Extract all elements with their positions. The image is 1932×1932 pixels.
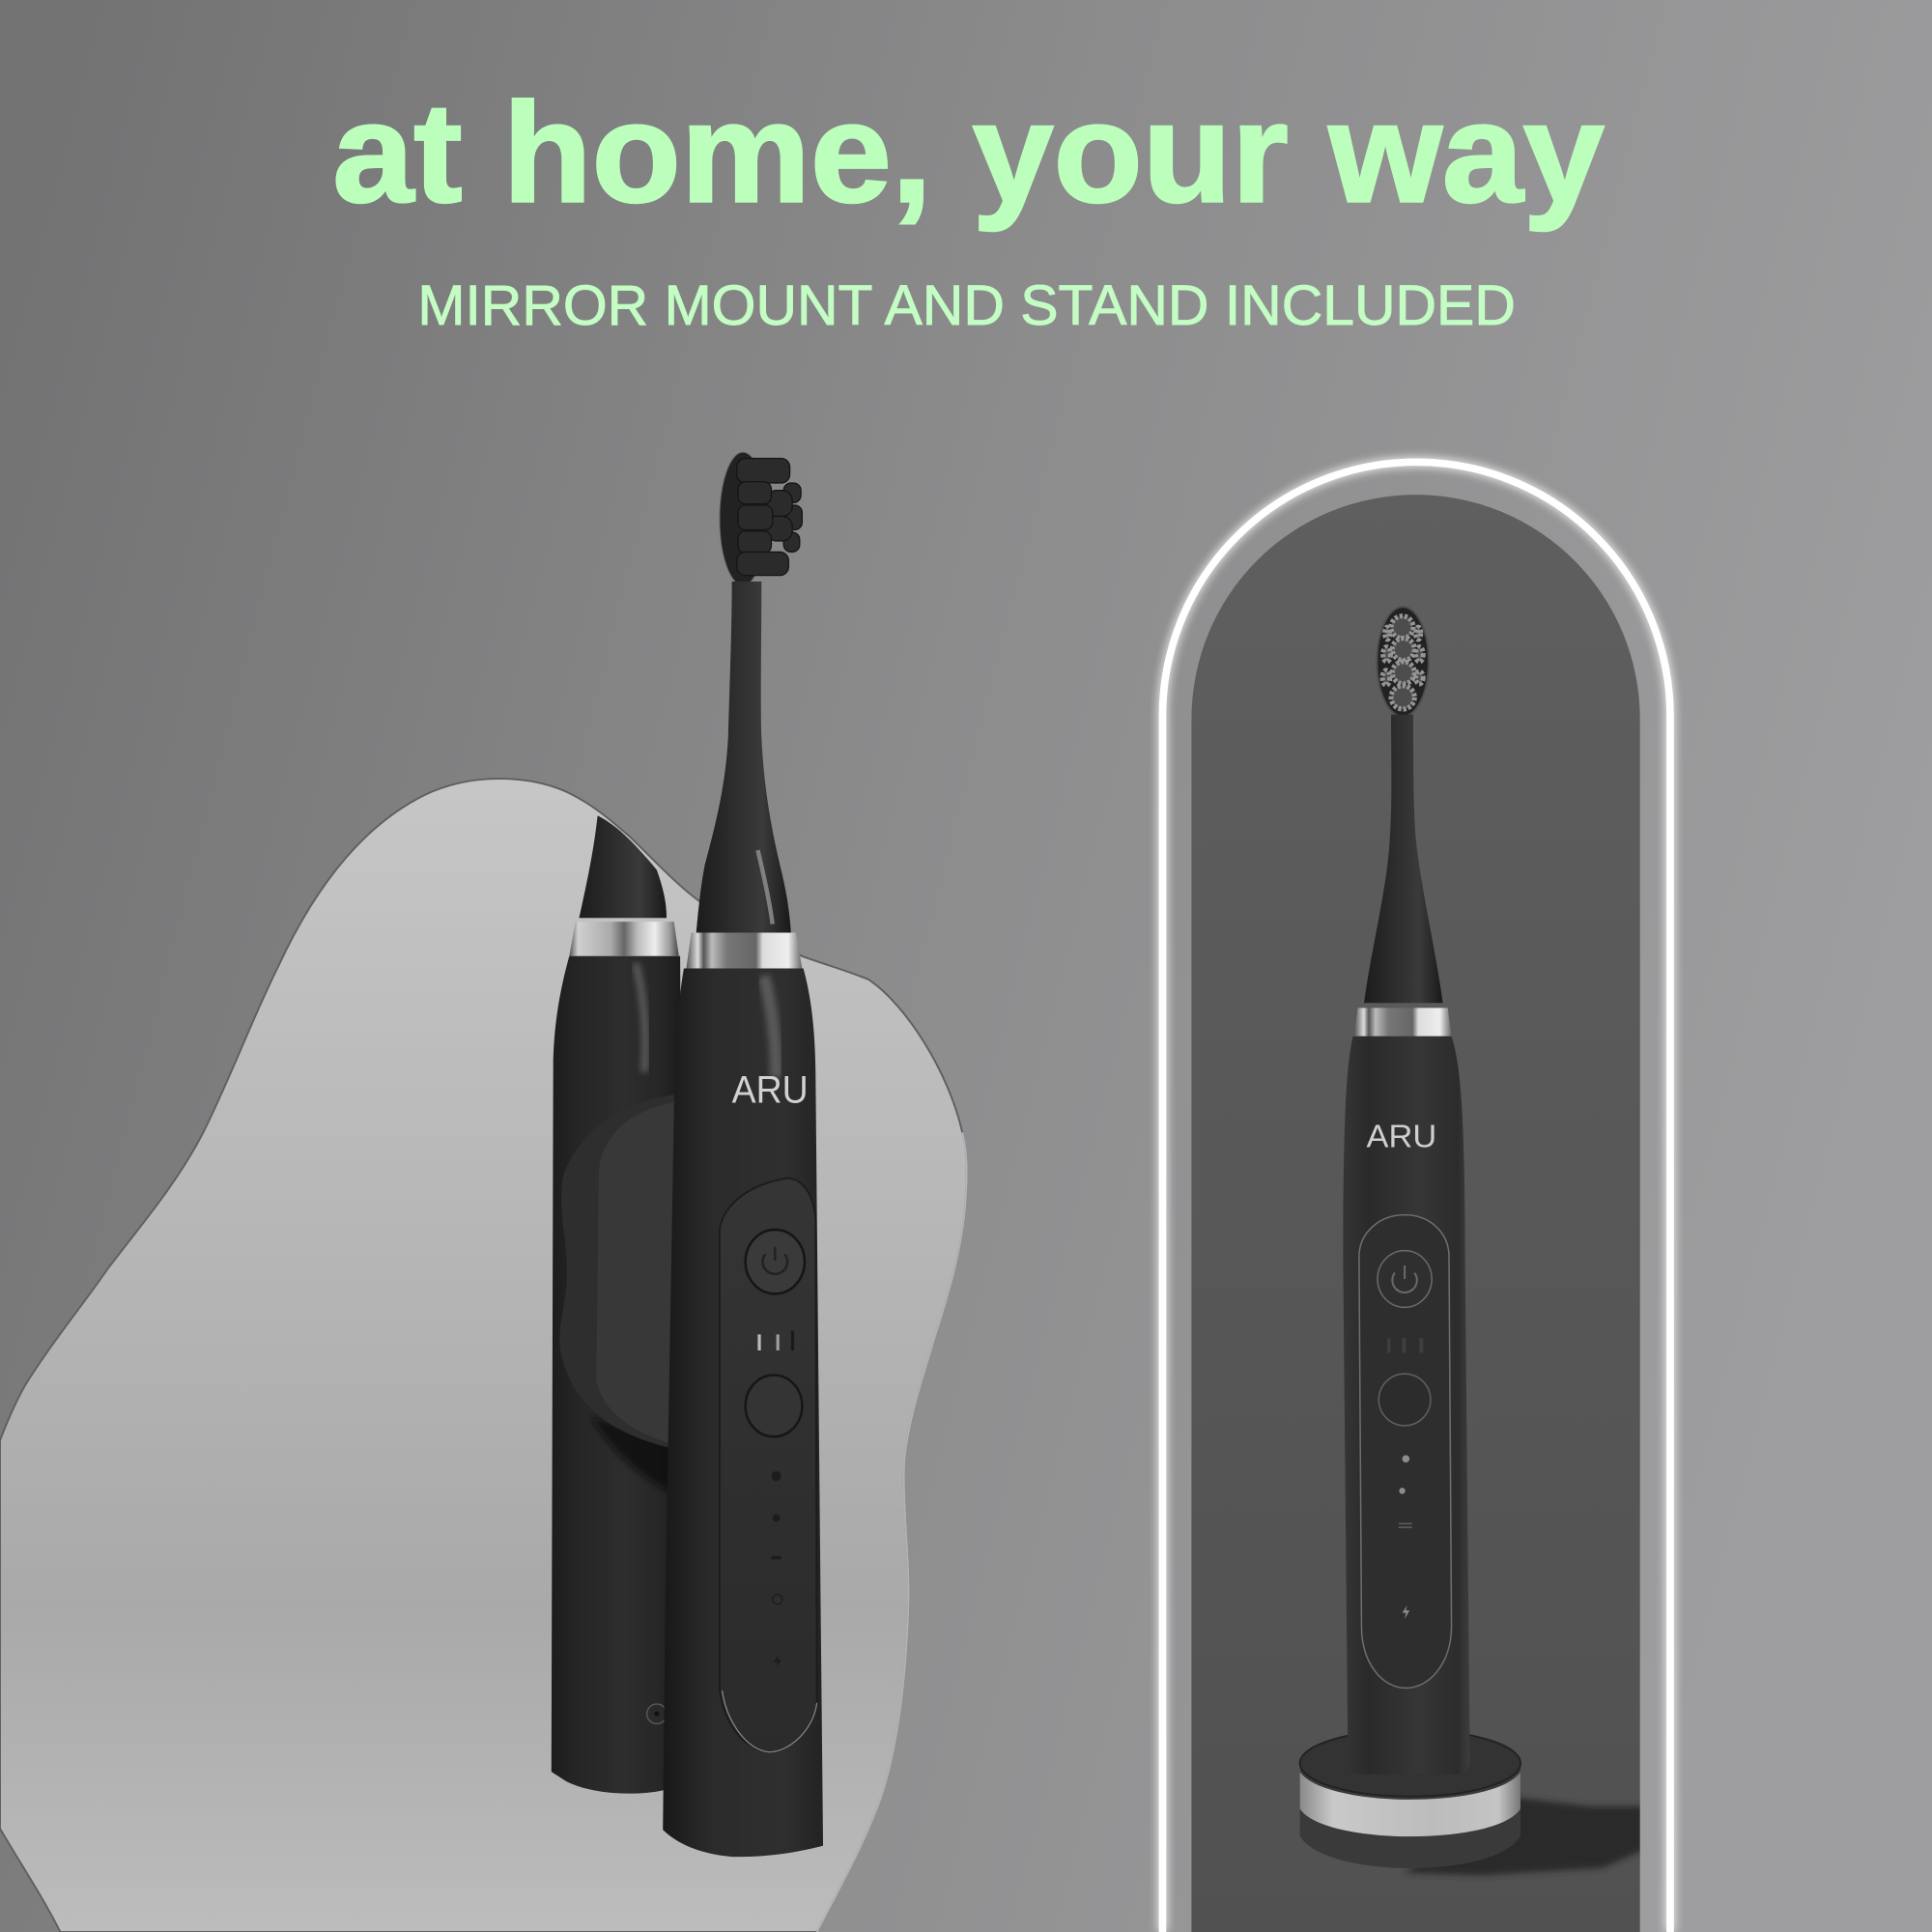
silver ring xyxy=(686,933,802,969)
ARU logo: ARU xyxy=(732,1069,809,1112)
power button xyxy=(1378,1251,1432,1307)
charging port xyxy=(647,1704,667,1723)
mode button xyxy=(1378,1374,1431,1426)
neck xyxy=(1364,715,1443,1003)
panel: arch niche xyxy=(1162,462,1670,1932)
dark niche xyxy=(1191,495,1640,1932)
neck highlight xyxy=(757,850,773,924)
handle xyxy=(663,969,823,1857)
power button xyxy=(746,1230,805,1293)
mode icons xyxy=(1399,1455,1412,1619)
reflected handle xyxy=(552,956,685,1794)
mirror mount inner xyxy=(596,1101,680,1446)
ARU logo: ARU xyxy=(1367,1119,1436,1154)
mode button xyxy=(746,1375,802,1436)
control panel xyxy=(720,1178,817,1752)
bristles xyxy=(737,458,802,576)
intensity lights xyxy=(757,1331,794,1350)
mirrored toothbrush reflection xyxy=(552,815,685,1794)
mirror xyxy=(0,779,967,1932)
front toothbrush xyxy=(663,452,823,1857)
handle highlight xyxy=(764,976,777,1078)
panel rim light xyxy=(722,1690,817,1752)
reflected brush cone xyxy=(579,815,667,918)
reflected highlight xyxy=(636,963,645,1072)
neck xyxy=(696,582,791,934)
intensity lights xyxy=(1387,1338,1423,1353)
mirror mount outer xyxy=(559,1094,680,1450)
charging stand xyxy=(1300,1730,1520,1868)
mount shadow xyxy=(591,1417,680,1497)
subtitle: MIRROR MOUNT AND STAND INCLUDED xyxy=(417,274,1516,337)
handle xyxy=(1343,1037,1470,1775)
silver ring xyxy=(1354,1008,1452,1037)
arch outline xyxy=(1162,462,1670,1932)
brush head xyxy=(1377,607,1429,717)
mode icons xyxy=(771,1471,782,1667)
brush head back xyxy=(720,452,766,585)
toothbrush on stand xyxy=(1300,607,1520,1868)
cast shadow xyxy=(1405,1797,1645,1875)
title: at home, your way xyxy=(332,74,1605,233)
control panel xyxy=(1359,1215,1452,1688)
arch glow xyxy=(1162,462,1670,1932)
reflected silver ring xyxy=(569,922,679,956)
bristle tufts xyxy=(1382,616,1423,709)
